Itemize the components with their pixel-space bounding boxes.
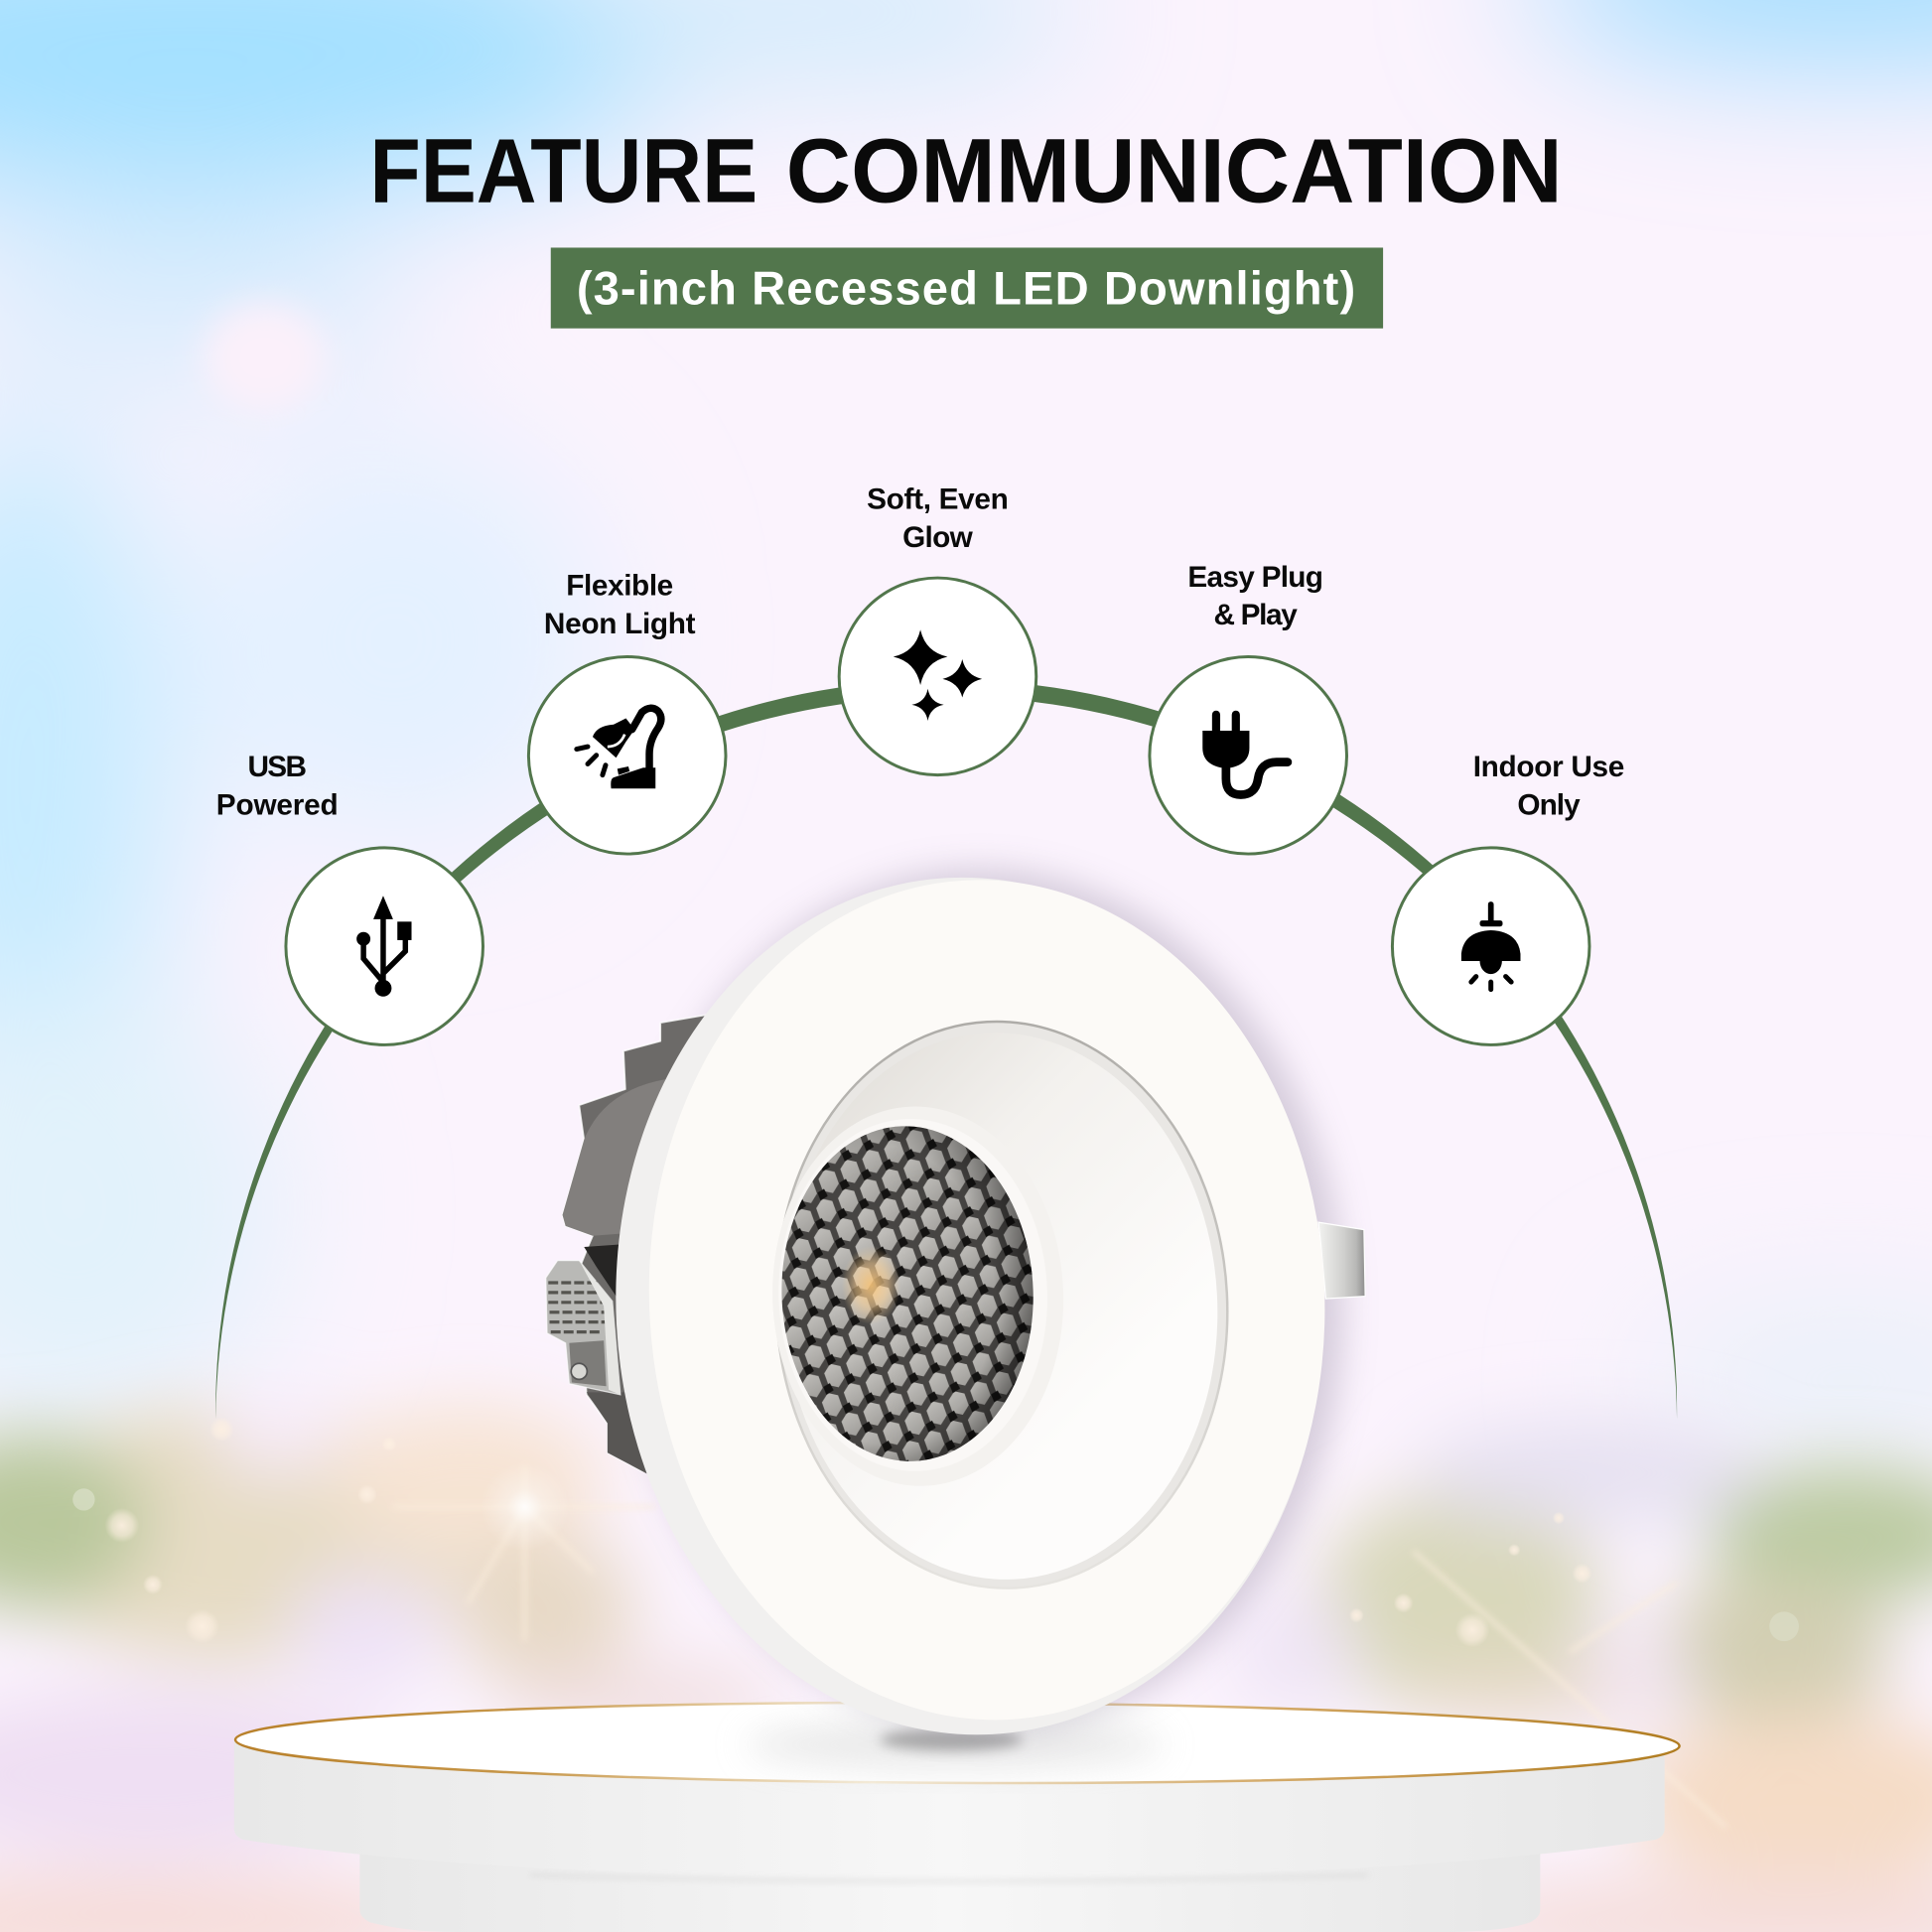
feature: Easy Plug & Play: Easy Plug xyxy=(1187,561,1323,594)
inner ring and cone xyxy=(761,1010,1242,1599)
feature: Flexible Neon Light: Flexible xyxy=(566,569,673,602)
title: COMMUNICATION xyxy=(786,121,1563,222)
icon: USB trident xyxy=(356,896,412,997)
grey housing xyxy=(563,1014,752,1484)
spring clip xyxy=(546,1261,621,1395)
feature: Easy Plug & Play: & Play xyxy=(1213,599,1298,631)
feature: Soft, Even Glow: Soft, Even xyxy=(867,483,1009,516)
subtitle banner: (3-inch Recessed LED Downlight) xyxy=(577,262,1355,315)
feature: Soft, Even Glow: Glow xyxy=(902,521,974,554)
product shadow on podium xyxy=(746,1721,1165,1769)
green connecting arc xyxy=(215,680,1677,1419)
feature: Indoor Use Only: Indoor Use xyxy=(1473,751,1624,783)
feature: Indoor Use Only: Only xyxy=(1517,788,1581,821)
feature: Indoor Use Only xyxy=(1392,751,1624,1044)
cone inner face xyxy=(769,1022,1231,1590)
feature: USB Powered: Powered xyxy=(216,788,339,821)
feature: USB Powered: USB xyxy=(247,751,307,783)
flange rim xyxy=(594,860,1345,1752)
podium top surface xyxy=(235,1700,1680,1786)
flange face xyxy=(627,863,1346,1737)
feature: Soft, Even Glow xyxy=(839,483,1036,775)
title: FEATURE xyxy=(369,121,758,222)
product drop shadow xyxy=(607,851,1365,1749)
feature: Flexible Neon Light xyxy=(528,569,726,854)
icon: power plug xyxy=(1202,715,1288,794)
right metal tab xyxy=(1318,1222,1365,1299)
product: recessed LED downlight xyxy=(546,851,1365,1752)
feature: USB Powered xyxy=(216,751,483,1044)
icon: desk lamp xyxy=(577,708,661,788)
feature: Flexible Neon Light: Neon Light xyxy=(544,608,696,640)
podium xyxy=(234,1700,1680,1932)
feature: Easy Plug & Play xyxy=(1150,561,1346,854)
subtitle banner xyxy=(551,247,1383,329)
honeycomb grille xyxy=(776,1122,1038,1465)
podium lower tier xyxy=(359,1824,1540,1932)
icon: pendant lamp xyxy=(1461,904,1520,990)
podium upper tier xyxy=(234,1737,1665,1877)
icon: sparkles xyxy=(894,629,982,721)
lens lip xyxy=(766,1101,1070,1491)
